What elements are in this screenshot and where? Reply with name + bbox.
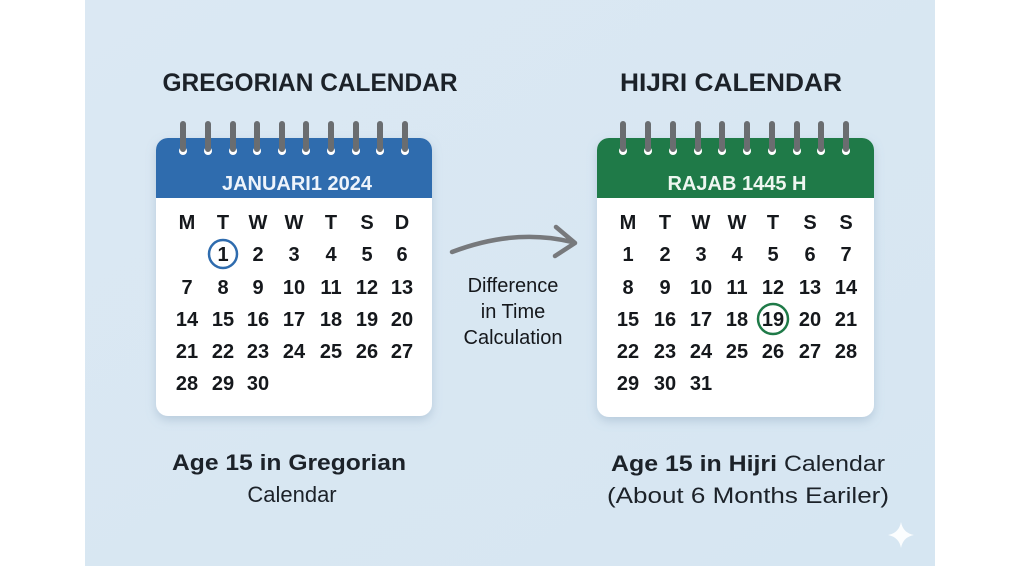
calendar: gregorian: 8: [217, 277, 229, 299]
calendar: gregorian: 6: [396, 244, 408, 266]
calendar: gregorian: 27: [391, 341, 413, 363]
calendar: hijri: 3: [695, 244, 707, 266]
calendar: hijri: 30: [654, 373, 676, 395]
calendar: gregorian: 28: [176, 373, 198, 395]
calendar: gregorian: 4: [325, 244, 337, 266]
calendar: gregorian: 16: [247, 309, 269, 331]
calendar: hijri: 26: [762, 341, 784, 363]
calendar: gregorian: 2: [252, 244, 264, 266]
calendar: hijri: 23: [654, 341, 676, 363]
calendar: hijri: 15: [617, 309, 639, 331]
calendar: gregorian: 21: [176, 341, 198, 363]
calendar: gregorian: W: [249, 212, 268, 234]
calendar: gregorian: 9: [252, 277, 264, 299]
calendar: gregorian: 7: [181, 277, 193, 299]
rings: [619, 124, 850, 155]
calendar: hijri: 7: [840, 244, 852, 266]
calendar: gregorian: 29: [212, 373, 234, 395]
calendar: hijri: 28: [835, 341, 857, 363]
arrow label: in Time: [481, 301, 545, 323]
calendar: hijri: 9: [659, 277, 671, 299]
calendar: hijri: 6: [804, 244, 816, 266]
calendar: hijri: 11: [726, 277, 748, 299]
calendar: hijri: 18: [726, 309, 748, 331]
calendar: hijri: 10: [690, 277, 712, 299]
calendar: hijri: M: [620, 212, 636, 234]
caption: gregorian: Age 15 in Gregorian: [172, 450, 406, 475]
calendar: hijri: 13: [799, 277, 821, 299]
calendar: hijri: W: [728, 212, 747, 234]
icon: sparkle: [888, 522, 914, 548]
caption: gregorian: [172, 450, 406, 507]
calendar: gregorian: 24: [283, 341, 306, 363]
calendar: hijri: 5: [767, 244, 779, 266]
arrow: [452, 227, 575, 256]
calendar: gregorian: 10: [283, 277, 305, 299]
calendar: hijri: 31: [690, 373, 712, 395]
calendar: gregorian: M: [179, 212, 195, 234]
calendar: gregorian: 17: [283, 309, 305, 331]
caption: hijri: (About 6 Months Eariler): [607, 483, 889, 508]
calendar: hijri: 29: [617, 373, 639, 395]
calendar: gregorian: 12: [356, 277, 378, 299]
calendar: gregorian: [156, 124, 432, 416]
calendar: hijri: W: [692, 212, 711, 234]
calendar: hijri: T: [767, 212, 779, 234]
calendar: hijri: 20: [799, 309, 821, 331]
title: hijri: HIJRI CALENDAR: [620, 69, 842, 97]
calendar: hijri: 1: [622, 244, 634, 266]
caption: gregorian: Calendar: [247, 482, 337, 507]
calendar: gregorian: 5: [361, 244, 373, 266]
caption: hijri: Age 15 in Hijri Calendar: [611, 451, 885, 476]
calendar: gregorian: T: [325, 212, 337, 234]
calendar: hijri: 2: [659, 244, 671, 266]
calendar: hijri: 14: [835, 277, 858, 299]
calendar: hijri: 22: [617, 341, 639, 363]
calendar: gregorian: 13: [391, 277, 413, 299]
calendar: gregorian: 11: [320, 277, 342, 299]
calendar: hijri: 17: [690, 309, 712, 331]
calendar: gregorian: 19: [356, 309, 378, 331]
calendar: gregorian: JANUARI1 2024: [222, 173, 373, 195]
calendar: hijri: 27: [799, 341, 821, 363]
calendar: gregorian: 15: [212, 309, 234, 331]
calendar: gregorian: 26: [356, 341, 378, 363]
arrow label: Calculation: [464, 327, 562, 349]
calendar: hijri: [597, 124, 874, 417]
calendar: hijri: RAJAB 1445 H: [668, 173, 806, 195]
calendar: hijri: S: [803, 212, 817, 234]
calendar: gregorian: D: [395, 212, 409, 234]
calendar: hijri: 12: [762, 277, 784, 299]
calendar: gregorian: 30: [247, 373, 269, 395]
calendar: gregorian: 14: [176, 309, 199, 331]
title: gregorian: GREGORIAN CALENDAR: [162, 69, 458, 97]
calendar: gregorian: 18: [320, 309, 342, 331]
calendar: gregorian: 25: [320, 341, 342, 363]
calendar: hijri: T: [659, 212, 671, 234]
arrow label: Difference: [468, 275, 558, 297]
calendar: gregorian: 20: [391, 309, 413, 331]
calendar: hijri: 19: [762, 309, 784, 331]
calendar: hijri: 4: [731, 244, 743, 266]
calendar: gregorian: 1: [217, 244, 229, 266]
rings: [179, 124, 409, 155]
calendar: hijri: 24: [690, 341, 713, 363]
calendar: hijri: S: [839, 212, 853, 234]
calendar: gregorian: W: [285, 212, 304, 234]
calendar: gregorian: 23: [247, 341, 269, 363]
calendar: hijri: 21: [835, 309, 857, 331]
calendar: hijri: 16: [654, 309, 676, 331]
calendar: gregorian: T: [217, 212, 229, 234]
calendar: gregorian: 3: [288, 244, 300, 266]
calendar: hijri: 25: [726, 341, 748, 363]
caption: hijri: [607, 451, 889, 508]
calendar: gregorian: 22: [212, 341, 234, 363]
calendar: hijri: 8: [622, 277, 634, 299]
calendar: gregorian: S: [360, 212, 374, 234]
